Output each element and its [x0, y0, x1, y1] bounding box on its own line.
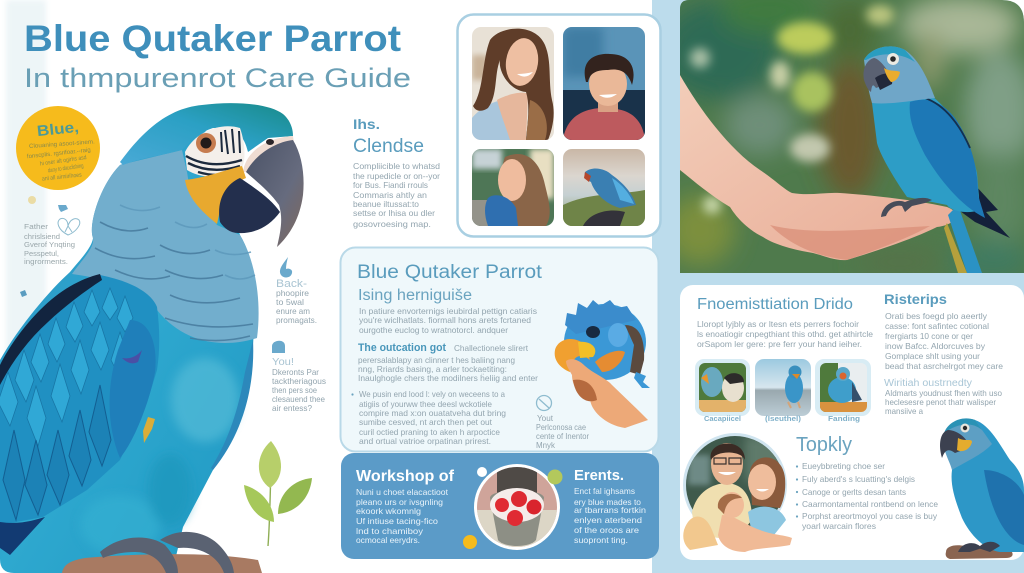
subheading text: Aldmarts youdnust fhen with uso: [885, 388, 1002, 398]
side note: father: [24, 224, 75, 266]
workshop text: Nuni u choet elacactioot: [356, 487, 449, 497]
food photo circle: [474, 464, 560, 550]
tips text: Gomplace shlt using your: [885, 351, 980, 361]
subheading text: [885, 388, 1002, 416]
panel: info white: [680, 285, 1024, 560]
palm shadow: [770, 225, 930, 260]
training text: orSapom ler gere: pre ferr your hand ieiher.: [697, 339, 862, 349]
checklist: Canoge or gerlts desan tants: [802, 487, 906, 497]
section text: Inaulghogle chers the modilners ḧeliig and enter: [358, 373, 538, 383]
side note: father: Pesspetul,: [24, 251, 59, 258]
photo parrot body: [871, 67, 980, 212]
body: the rupedicle or on--yor: [353, 171, 440, 181]
callout text: hi oser alt ogirhs asd: [40, 155, 87, 167]
workshop text: ocmocal eerydrs.: [356, 535, 420, 545]
callout: yellow circle: [16, 106, 100, 190]
wing dark edge: [0, 274, 102, 385]
cartoon parrot and hand: [555, 300, 650, 428]
callout text: anl all airniirihoes: [42, 173, 82, 183]
purple accent: [122, 350, 142, 363]
panel heading: Blue Qutaker Parrot: [357, 262, 543, 283]
checklist: yoarl warcain flores: [802, 521, 876, 531]
icon: small fish: [58, 205, 68, 212]
callout text: dany to dauclishing: [48, 163, 84, 174]
bullet text: [359, 389, 506, 446]
body: [353, 161, 440, 229]
man: [692, 443, 752, 540]
tips text: inow Bafcc. Aldorcuves by: [885, 341, 986, 351]
tips text: Orati bes foegd plo aeertly: [885, 311, 988, 321]
photo: woman smiling: [472, 27, 554, 140]
body: for Bus. Fiandi rrouls: [353, 180, 428, 190]
events text: of the oroos are: [574, 525, 639, 535]
bokeh foliage: [660, 0, 1024, 280]
photo: bird on grass: [563, 149, 645, 226]
side note: Mnyk: [536, 440, 556, 450]
bullet text: compire mad x:on ouatatveha dut bring: [359, 408, 506, 418]
checklist: [796, 461, 938, 531]
neck feathers: [72, 150, 259, 343]
chest shading: [80, 358, 239, 555]
eye: [887, 53, 899, 65]
photo: boy: [563, 27, 645, 140]
wing tip: [945, 185, 1010, 238]
section text: nng, Rriards basing, a arler tockaetiting:: [358, 364, 507, 374]
side note: father: ingrorments.: [24, 259, 68, 266]
text block: you: Dkeronts Par: [272, 367, 319, 377]
events text: suopront ting.: [574, 535, 628, 545]
body: settse or lhisa ou dler: [353, 208, 435, 218]
bullet text: We pusin end lood l: vely on weceens to a: [359, 389, 505, 399]
side note: father: Gverof Ynqting: [24, 242, 75, 249]
parrot body: [0, 130, 256, 573]
heading large: Clendse: [353, 136, 424, 157]
lower beak: [875, 73, 893, 90]
thumbnail labels: Cacapiicel: [704, 416, 741, 423]
section text: Challectionele slirert: [454, 343, 529, 353]
photo: woman side: [472, 149, 554, 226]
photo parrot tail: [948, 205, 982, 273]
yellow cheek: [185, 166, 246, 224]
callout text: [27, 139, 95, 183]
section text: perersalablapy an clinner t hes baliing nang: [358, 355, 515, 365]
arm and hand: [680, 75, 957, 260]
face stripes: [186, 129, 242, 175]
tips text: bead that asrchelrgot mey care: [885, 361, 1003, 371]
workshop text: ekoork wkomnlg: [356, 506, 421, 516]
tips text: [885, 311, 1003, 371]
subtitle: In thmpurenrot Care Guide: [24, 63, 411, 93]
yellow dot: [463, 535, 477, 549]
workshop text: lnd to chamiboy: [356, 526, 424, 536]
text block: you: air entess?: [272, 403, 312, 413]
intro text: ourgothe euclog to wratnotorcl. andquer: [359, 325, 508, 335]
beak: [863, 58, 891, 92]
left pale strip: [6, 0, 46, 360]
lower beak: [219, 178, 280, 233]
text block: clendse: [353, 116, 440, 229]
panel: care info: [340, 248, 658, 452]
training text: [697, 319, 873, 349]
events text: enlyen aterbend: [574, 515, 642, 525]
panel: photo grid: [458, 14, 660, 236]
text block: back: enure am: [276, 306, 310, 316]
text block: back: to 5wal: [276, 297, 304, 307]
family photo circle: [683, 433, 792, 552]
checklist: Caarmontamental rontbend on lence: [802, 499, 938, 509]
training text: ls enoatiogir cnpegthiant this othd. get athirtcle: [697, 329, 873, 339]
photo parrot wing: [910, 100, 985, 218]
thumbnail 3: [815, 359, 871, 416]
text block: back: promagats.: [276, 315, 317, 325]
checklist: Eueybbreting choe ser: [802, 461, 885, 471]
icon: heart outline: [58, 218, 80, 235]
icon: small flower: [28, 196, 36, 204]
crest: [864, 46, 915, 62]
small parrot: [940, 418, 1024, 559]
side note: father: Father: [24, 224, 49, 231]
training text: Lloropt lyjbly as or ltesn ets perrers fochoir: [697, 319, 859, 329]
events text: Enct fal ighsams: [574, 486, 635, 496]
intro text: In patiure envorternigs ieubirdal pettign catiaris: [359, 306, 537, 316]
head: [864, 46, 935, 103]
light bokeh spots: [690, 5, 894, 214]
body: Commaris ahtly an: [353, 190, 427, 200]
neck feather lines: [95, 205, 255, 341]
side note: Perlconosa cae: [536, 422, 586, 432]
text block: back: phoopire: [276, 288, 309, 298]
woman: [748, 457, 786, 540]
shoulder blue: [110, 320, 156, 458]
green dot: [548, 470, 562, 484]
bullet text: curil octied praning to aken h arpoctice: [359, 427, 500, 437]
thumbnail labels: (Iseuthel): [765, 416, 801, 423]
panel subheading: Ising herniguiše: [358, 287, 472, 304]
intro text: you're wiclhatlats. fiormall hons arets fcrtaned: [359, 315, 531, 325]
tips text: casse: font safintec cotional: [885, 321, 989, 331]
side note: [536, 413, 589, 450]
workshop heading: Workshop of: [356, 468, 455, 485]
right blue backdrop: [652, 0, 1024, 573]
heading small: Ihs.: [353, 116, 380, 132]
right foot: [160, 532, 234, 573]
icon: drop: [280, 257, 292, 277]
icon: arch: [272, 341, 285, 353]
tail yellow: [944, 223, 967, 273]
left foot: [100, 537, 178, 573]
workshop text: [356, 487, 449, 545]
thumbnail labels: [704, 416, 860, 423]
eye patch: [185, 126, 244, 177]
body: Compliicible to whatsd: [353, 161, 440, 171]
callout heading: Blue,: [36, 119, 80, 140]
workshop text: pleano urs or ivsgnling: [356, 497, 443, 507]
text block: back: [276, 278, 317, 325]
bullet: [351, 393, 354, 396]
subheading text: heclesesre penot thatr walisper: [885, 397, 996, 407]
wing: [0, 274, 159, 525]
panel: workshop band: [341, 453, 659, 559]
yellow cheek: [884, 68, 900, 82]
child: [683, 492, 792, 552]
body: gosovroesing map.: [353, 219, 431, 229]
text block: you: [272, 357, 326, 413]
face strip: [243, 136, 295, 172]
bullet text: and ortual vatrioe orpatinan prirest.: [359, 436, 491, 446]
text block: you: clesauend thee: [272, 394, 325, 404]
subheading text: mansiive a: [885, 406, 923, 416]
events text: ar tbarrans fortkin: [574, 505, 646, 515]
section heading: The outcation got: [358, 342, 446, 354]
events heading: Erents.: [574, 467, 624, 484]
checklist: Porphst areortmoyol you case is buy: [802, 511, 938, 521]
icon: ring: [536, 396, 552, 410]
title: Blue Qutaker Parrot: [24, 18, 401, 59]
thumbnail labels: Fanding: [828, 416, 860, 423]
side note: cente of Inentor: [536, 431, 589, 441]
white dot: [477, 467, 487, 477]
events text: [574, 486, 646, 545]
tail feathers: [0, 517, 45, 555]
large parrot illustration: [0, 103, 304, 573]
flight feathers: [3, 385, 111, 520]
perch: [62, 554, 262, 573]
feet: [881, 198, 932, 217]
wing edge: [925, 98, 970, 148]
plant illustration: [244, 441, 312, 546]
body: beanue iltussat:to: [353, 199, 419, 209]
callout text: fonscplis. rgsrifoar.--raig: [27, 148, 91, 160]
covert feathers: [0, 288, 133, 446]
text block: you: then pers soe: [272, 385, 317, 395]
text block: you: tacktheriagous: [272, 376, 326, 386]
checklist: Fuly aberd's s lcuatting's delgis: [802, 474, 915, 484]
workshop text: Uf intiuse tacing-fico: [356, 516, 438, 526]
crest: [120, 103, 293, 165]
top-right corner: [1002, 0, 1024, 22]
events text: ery blue mades to: [574, 497, 641, 507]
text block: back: Back-: [276, 278, 307, 290]
heading: training: Fnoemisttiation Drido: [697, 296, 853, 313]
side note: Yout: [537, 413, 554, 423]
intro text: [359, 306, 537, 335]
eye: [196, 133, 216, 153]
text block: you: You!: [272, 357, 294, 368]
photo: parrot on hand: [660, 0, 1024, 280]
side note: father: chrislsiend: [24, 234, 60, 241]
thumbnail 2: [755, 359, 811, 416]
small marker: [20, 290, 27, 297]
right wing strip: [211, 340, 253, 470]
section text: [358, 343, 538, 383]
subheading: Wiritiah oustrnedty: [884, 378, 972, 389]
upper beak: [246, 140, 304, 247]
heading: tips: Risterips: [884, 291, 947, 307]
bullet text: atigiis of yourww thee deesl wckotiele: [359, 399, 492, 409]
nostril: [266, 139, 274, 145]
tips text: frergiarts 10 cone or qer: [885, 331, 973, 341]
callout text: Clouaning asoot-sinem.: [29, 139, 95, 150]
heading: topkly: Topkly: [796, 434, 852, 456]
yellow accent: [143, 417, 155, 443]
thumbnail 1: [695, 359, 750, 416]
bullet text: sumibe cesved, nt arch then pet out: [359, 417, 493, 427]
